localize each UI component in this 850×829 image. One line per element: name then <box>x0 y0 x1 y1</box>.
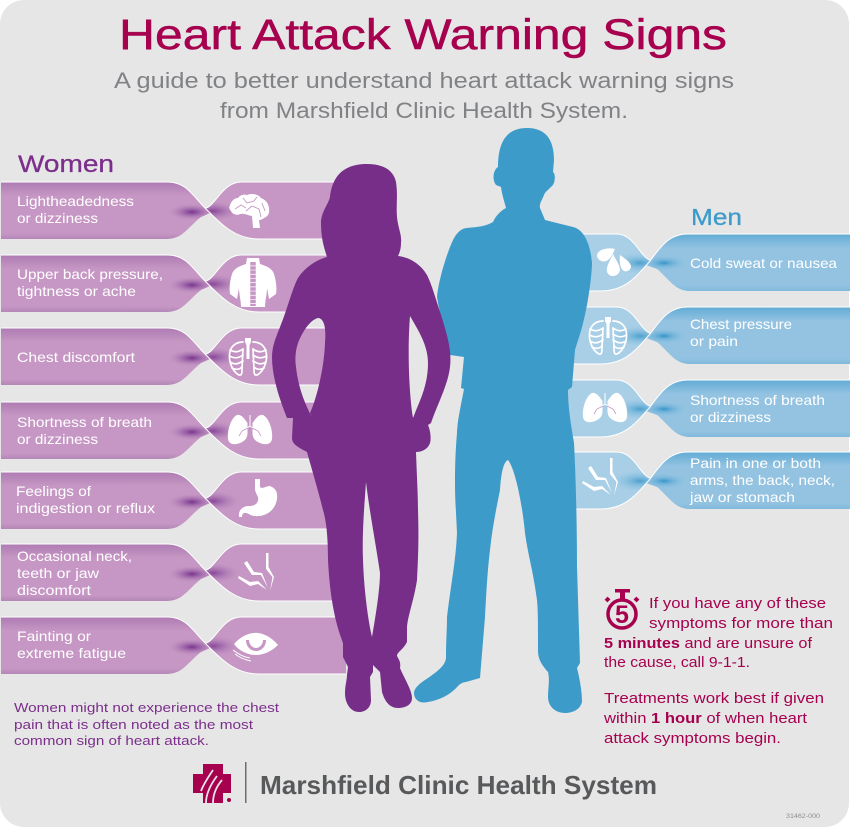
ribbon: fainting: Fainting or <box>17 629 92 644</box>
subtitle: from Marshfield Clinic Health System. <box>220 98 628 123</box>
callout: one hour: attack symptoms begin. <box>604 731 781 747</box>
icon: lungs <box>228 415 272 444</box>
ribbon: shortness of breath: Shortness of breath <box>17 415 152 430</box>
silhouette: woman <box>272 164 450 712</box>
icon: stomach <box>239 479 277 517</box>
note: women: pain that is often noted as the most <box>14 717 253 732</box>
ribbon: shortness of breath: or dizziness <box>690 410 771 425</box>
ribbon: pain in arms: arms, the back, neck, <box>690 473 835 488</box>
callout: five minutes: 5 minutes and are unsure of <box>604 636 813 652</box>
title: Heart Attack Warning Signs <box>119 12 727 59</box>
ribbon: upper back: Upper back pressure, <box>17 267 163 282</box>
subtitle: A guide to better understand heart attack warning signs <box>114 68 734 93</box>
icon: back and spine <box>230 258 276 307</box>
ribbon: lightheadedness <box>1 182 346 239</box>
ribbon: neck, teeth or jaw: discomfort <box>17 583 91 598</box>
callout: five minutes <box>604 596 833 671</box>
ribbon: neck, teeth or jaw: teeth or jaw <box>17 566 99 581</box>
logo: cross mark <box>193 764 231 803</box>
heading: Men: Men <box>691 204 742 230</box>
ribbon: pain in arms <box>560 452 850 509</box>
icon: lungs <box>583 393 627 422</box>
callout: one hour <box>603 691 824 747</box>
icon: pain nerves <box>582 458 618 496</box>
panel: men symptom ribbons <box>560 234 850 509</box>
ribbon: shortness of breath <box>1 402 346 459</box>
icon: five minute stopwatch <box>606 589 638 629</box>
ribbon: neck, teeth or jaw: Occasional neck, <box>17 549 132 564</box>
logo divider <box>245 762 246 803</box>
heading: Women: Women <box>18 151 114 178</box>
ribbon: fainting: extreme fatigue <box>17 646 126 661</box>
ribbon: lightheadedness: or dizziness <box>17 211 98 226</box>
subtitle <box>114 68 734 123</box>
callout: five minutes: symptoms for more than <box>649 616 833 632</box>
note: women: Women might not experience the chest <box>14 700 279 715</box>
note: women: common sign of heart attack. <box>14 733 209 748</box>
ribbon: lightheadedness: Lightheadedness <box>17 194 134 209</box>
ribbon: chest pressure: Chest pressure <box>690 317 792 332</box>
ribbon: shortness of breath <box>560 380 850 437</box>
callout: one hour: within 1 hour of when heart <box>603 711 807 727</box>
ribbon: neck, teeth or jaw <box>1 544 346 601</box>
ribbon: indigestion: Feelings of <box>16 484 91 499</box>
icon: drooping eye <box>233 633 278 661</box>
ribbon: upper back: tightness or ache <box>17 284 136 299</box>
note: women <box>14 700 279 748</box>
panel: women symptom ribbons <box>1 182 346 674</box>
callout: five minutes: If you have any of these <box>649 596 826 612</box>
ribbon: cold sweat: Cold sweat or nausea <box>690 256 837 271</box>
icon: pain nerves <box>238 553 274 591</box>
icon: brain <box>229 194 269 228</box>
document code: 31462-000 <box>786 814 821 820</box>
icon: ribcage <box>589 317 627 354</box>
silhouette: man <box>414 128 592 713</box>
ribbon: chest pressure <box>560 307 850 364</box>
ribbon: cold sweat <box>560 234 850 291</box>
icon: five minute stopwatch: 5 <box>615 601 629 629</box>
icon: sweat drops <box>597 248 631 276</box>
icon: ribcage <box>229 338 267 375</box>
ribbon: indigestion: indigestion or reflux <box>16 501 155 516</box>
ribbon: chest pressure: or pain <box>690 334 738 349</box>
ribbon: upper back <box>1 255 346 312</box>
logo: wordmark: Marshfield Clinic Health System <box>260 770 657 800</box>
ribbon: shortness of breath: or dizziness <box>17 432 98 447</box>
callout: one hour: Treatments work best if given <box>604 691 824 707</box>
ribbon: shortness of breath: Shortness of breath <box>690 393 825 408</box>
ribbon: pain in arms: Pain in one or both <box>690 456 821 471</box>
ribbon: chest discomfort: Chest discomfort <box>17 350 135 365</box>
callout: five minutes: the cause, call 9-1-1. <box>604 655 750 671</box>
ribbon: chest discomfort <box>1 328 346 385</box>
ribbon: fainting <box>1 617 346 674</box>
ribbon: indigestion <box>1 472 346 529</box>
ribbon: pain in arms: jaw or stomach <box>689 490 795 505</box>
